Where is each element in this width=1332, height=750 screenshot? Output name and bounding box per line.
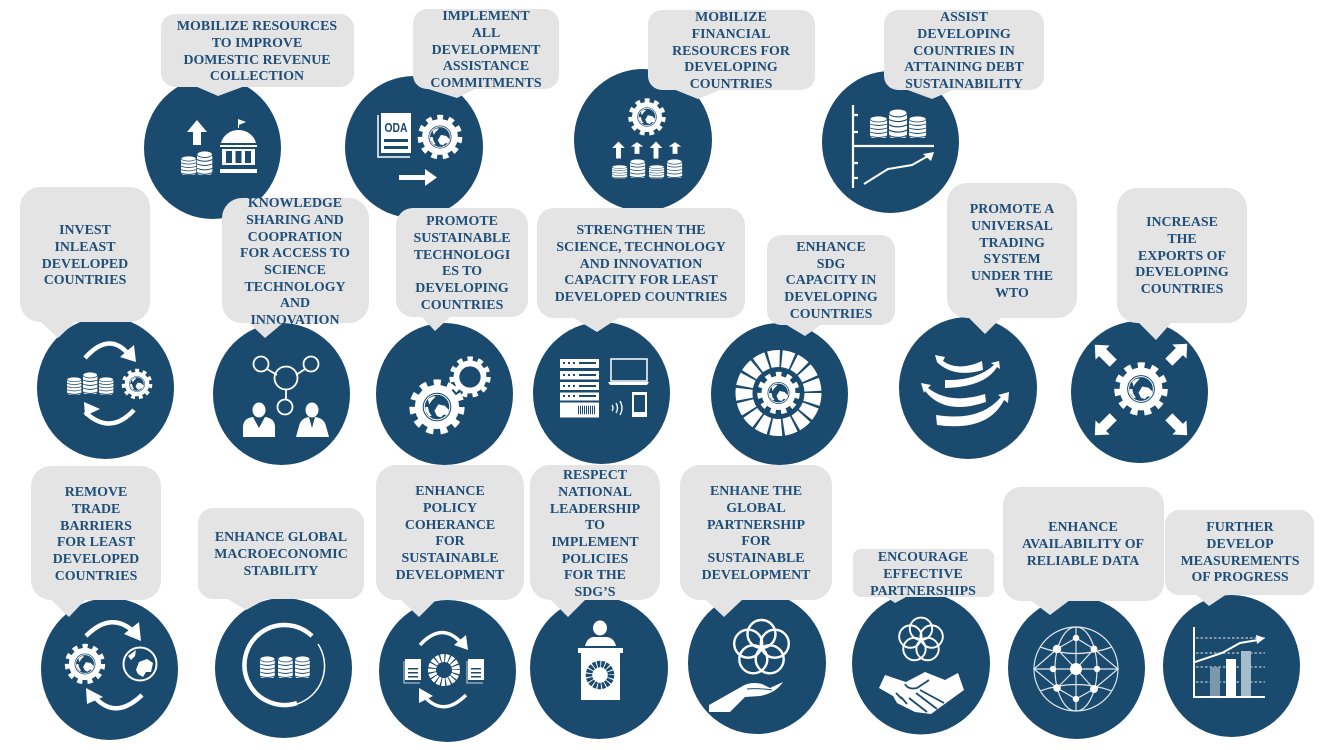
text: ASSIST (940, 10, 989, 25)
icon: server, laptop and phone (560, 359, 649, 418)
text: COOPRATION (248, 230, 342, 245)
text: ATTAINING DEBT (904, 60, 1024, 75)
text: DEVELOPED (42, 257, 128, 272)
circle: implement development assistance (345, 76, 483, 218)
text: INVEST (59, 223, 112, 238)
text: PARTNERSHIPS (870, 584, 976, 599)
text: LEADERSHIP (550, 502, 641, 517)
circle: mobilize domestic revenue (144, 77, 281, 219)
text: ENHANCE GLOBAL (215, 530, 347, 545)
text: NATIONAL (558, 485, 632, 500)
text: DEVELOPING (917, 27, 1011, 42)
text: DEVELOP (1206, 537, 1274, 552)
text: DEVELOPING (1135, 265, 1229, 280)
callout: mobilize resources (161, 14, 354, 96)
text: COUNTRIES (421, 298, 504, 313)
text: MEASUREMENTS (1181, 554, 1300, 569)
text: PARTNERSHIP (707, 518, 806, 533)
text: INLEAST (54, 240, 116, 255)
text: TRADE (72, 502, 120, 517)
text: DEVELOPING (784, 290, 878, 305)
icon: bar chart with rising line (1194, 627, 1265, 697)
text: TECHNOLOGI (414, 248, 510, 263)
text: ENHANCE (1048, 520, 1118, 535)
circle: SDG capacity (711, 323, 848, 465)
icon: two gears with globe (412, 359, 488, 432)
circle: mobilize financial resources (574, 69, 712, 211)
text: RELIABLE DATA (1027, 554, 1139, 569)
text: IMPLEMENT (442, 9, 530, 24)
callout: macroeconomic stability (198, 508, 364, 610)
text: AND INNOVATION (580, 257, 702, 272)
icon: debt chart with coins (853, 105, 934, 188)
circle: policy coherence (379, 600, 516, 742)
text: INNOVATION (250, 313, 340, 328)
callout: policy coherence (376, 465, 524, 617)
icon: gear, arrows and coin stacks (612, 100, 682, 178)
text: FOR THE (564, 568, 626, 583)
text: TRADING (979, 236, 1045, 251)
text: COLLECTION (210, 69, 304, 84)
text: WTO (995, 286, 1029, 301)
text: ALL (472, 26, 500, 41)
text: ENHANCE (415, 484, 485, 499)
text: IMPLEMENT (551, 535, 639, 550)
text: SUSTAINABLE (413, 231, 511, 246)
text: DEVELOPING (415, 281, 509, 296)
text: TO (585, 518, 605, 533)
text: UNDER THE (971, 269, 1053, 284)
icon: WTO curved arrows (921, 355, 1009, 426)
text: ENHANE THE (710, 484, 802, 499)
text: ENHANCE (796, 240, 866, 255)
callout: invest in LDCs (20, 187, 150, 338)
text: EFFECTIVE (883, 567, 963, 582)
text: SYSTEM (983, 252, 1041, 267)
icon: gear with four outward arrows (1088, 337, 1194, 442)
text: COUNTRIES (690, 77, 773, 92)
text: COUNTRIES (790, 307, 873, 322)
text: COUNTRIES IN (913, 44, 1015, 59)
text: DEVELOPED COUNTRIES (555, 290, 728, 305)
text: AVAILABILITY OF (1022, 537, 1144, 552)
text: SHARING AND (246, 213, 344, 228)
text: PROMOTE (426, 214, 498, 229)
icon: speaker at lectern (578, 620, 623, 700)
text: SUSTAINABILITY (905, 77, 1023, 92)
circle: reliable data (1008, 597, 1145, 739)
callout: remove trade barriers (31, 466, 161, 617)
callout: global partnership (680, 465, 832, 617)
text: FOR ACCESS TO (240, 246, 350, 261)
callout: strengthen science capacity (537, 208, 745, 332)
text: OF PROGRESS (1191, 570, 1289, 585)
text: EXPORTS OF (1138, 249, 1226, 264)
circle: measurements of progress (1163, 595, 1300, 737)
icon: SDG wheel with gear (744, 358, 813, 428)
icon: coins and gear cycle (67, 343, 151, 424)
icon: ODA document, gear and arrow (378, 113, 460, 186)
icon: gear and globe exchange (67, 622, 156, 708)
callout: reliable data (1003, 487, 1164, 615)
callout: knowledge sharing (222, 196, 369, 338)
text: DEVELOPMENT (702, 568, 811, 583)
text: REMOVE (65, 485, 127, 500)
circle: national leadership (530, 597, 668, 739)
callout: debt sustainability (884, 10, 1044, 99)
text: DEVELOPMENT (396, 568, 505, 583)
text: ASSISTANCE (443, 59, 529, 74)
circle: universal trading system (899, 317, 1037, 459)
text: INCREASE (1146, 215, 1218, 230)
text: SUSTAINABLE (401, 551, 499, 566)
text: STABILITY (244, 564, 318, 579)
text: RESOURCES FOR (672, 44, 791, 59)
text: BARRIERS (60, 519, 132, 534)
text: TECHNOLOGY (244, 280, 346, 295)
circle: effective partnerships (852, 592, 990, 734)
text: FURTHER (1206, 520, 1275, 535)
text: ENCOURAGE (878, 550, 968, 565)
text: SDG (817, 257, 845, 272)
text: COUNTRIES (44, 273, 127, 288)
icon: coins, up arrow and government building (181, 119, 257, 175)
text: TO IMPROVE (212, 36, 302, 51)
text: ES TO (442, 264, 482, 279)
text: UNIVERSAL (971, 219, 1053, 234)
text: COMMITMENTS (430, 76, 542, 91)
icon: documents and SDG wheel cycle (404, 632, 484, 707)
text: POLICIES (562, 552, 628, 567)
text: SUSTAINABLE (707, 551, 805, 566)
circle: increase exports (1071, 321, 1208, 463)
circle: debt sustainability (822, 71, 959, 213)
text: FOR LEAST (57, 535, 136, 550)
circle: remove trade barriers (41, 598, 178, 740)
callout: SDG capacity (767, 235, 895, 336)
callout: increase exports (1117, 188, 1247, 340)
text: COUNTRIES (1141, 282, 1224, 297)
icon: coins inside circular arc (244, 625, 325, 705)
icon: network globe (1034, 627, 1118, 711)
callout: implement assistance (413, 9, 559, 98)
text: RESPECT (563, 468, 628, 483)
circle: macroeconomic stability (215, 598, 352, 738)
icon: rosette over open hand (709, 620, 789, 712)
text: FOR (741, 534, 772, 549)
text: PROMOTE A (970, 202, 1054, 217)
callout: universal trading system (947, 183, 1077, 334)
text: CAPACITY FOR LEAST (564, 273, 719, 288)
icon: ODA document, gear and arrow: ODA (384, 120, 408, 135)
icon: network and two people (243, 356, 329, 437)
callout: measurements of progress (1165, 510, 1314, 606)
text: CAPACITY IN (786, 273, 876, 288)
text: COHERANCE (405, 518, 495, 533)
callout: sustainable technologies (396, 208, 528, 331)
circle: science technology capacity (533, 322, 670, 464)
callout: respect national leadership (530, 465, 660, 617)
text: KNOWLEDGE (248, 196, 342, 211)
text: SCIENCE (264, 263, 326, 278)
circle: global partnership (688, 592, 826, 734)
text: DEVELOPING (684, 60, 778, 75)
text: MOBILIZE (695, 10, 767, 25)
text: MOBILIZE RESOURCES (177, 19, 337, 34)
callout: mobilize financial resources (648, 10, 815, 99)
text: THE (1167, 232, 1197, 247)
text: STRENGTHEN THE (576, 223, 706, 238)
text: GLOBAL (726, 501, 786, 516)
text: DEVELOPED (53, 552, 139, 567)
text: COUNTRIES (55, 569, 138, 584)
text: FOR (435, 534, 466, 549)
text: MACROECONOMIC (214, 547, 348, 562)
circle: knowledge sharing (213, 323, 350, 465)
circle: sustainable technologies (376, 323, 513, 465)
text: POLICY (423, 501, 477, 516)
text: FINANCIAL (692, 27, 770, 42)
text: AND (280, 296, 310, 311)
icon: rosette over handshake (879, 618, 964, 714)
text: SCIENCE, TECHNOLOGY (556, 240, 726, 255)
circle: invest in least developed countries (37, 317, 174, 459)
callout: effective partnerships (853, 549, 994, 603)
text: DEVELOPMENT (432, 43, 541, 58)
text: SDG’S (575, 585, 616, 600)
text: DOMESTIC REVENUE (183, 53, 331, 68)
